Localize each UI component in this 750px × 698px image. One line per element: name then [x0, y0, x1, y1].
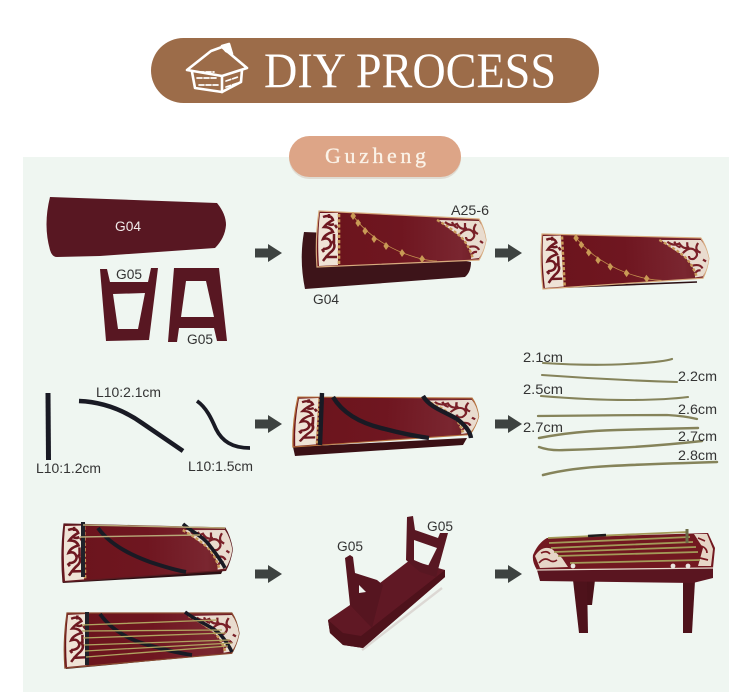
part: strings with lengths: 2.8cm [678, 448, 717, 463]
step: A25-6 board over G04: A25-6 [451, 203, 489, 218]
step: finished guzheng [533, 529, 715, 633]
part: bridge L10 1.5cm: L10:1.5cm [188, 459, 253, 474]
part: G05 leg left: G05 [116, 267, 142, 282]
part: bridge L10 2.1cm: L10:2.1cm [96, 385, 161, 400]
part: G05 leg right: G05 [187, 332, 213, 347]
arrow [255, 244, 282, 262]
part: bridge L10 1.2cm [36, 393, 101, 476]
part: G05 leg left [100, 267, 158, 341]
side [537, 568, 713, 583]
part: bridge L10 1.2cm: L10:1.2cm [36, 461, 101, 476]
part: strings with lengths: 2.6cm [678, 402, 717, 417]
top [533, 533, 715, 570]
step: A25-6 board over G04 [302, 203, 489, 307]
part: strings with lengths [523, 350, 717, 475]
part: bridge L10 1.5cm [188, 401, 253, 474]
arrow [255, 565, 282, 583]
icon: log house [187, 44, 247, 92]
part: G04 base board [46, 197, 226, 257]
arrow [495, 244, 522, 262]
part: G05 leg right [168, 268, 227, 347]
base board [328, 560, 445, 648]
step: G05 legs glued to underside [328, 516, 453, 650]
legs [587, 580, 595, 605]
step: G05 legs glued to underside: G05 [427, 519, 453, 534]
part: strings with lengths: 2.2cm [678, 369, 717, 384]
subtitle pill: Guzheng [289, 136, 461, 179]
part: strings with lengths: 2.1cm [523, 350, 563, 365]
subtitle pill: Guzheng: Guzheng [325, 143, 426, 168]
panel: guzheng steps [23, 157, 729, 692]
part: strings with lengths: 2.7cm [678, 429, 717, 444]
step: A25-6 board over G04: G04 [313, 292, 339, 307]
part: bridge L10 2.1cm [79, 385, 183, 451]
arrow [255, 415, 282, 433]
part: G04 base board: G04 [115, 219, 141, 234]
step: board with first strings [61, 519, 233, 583]
title: DIY process banner [151, 38, 599, 103]
back leg [406, 516, 448, 577]
title text: DIY PROCESS [264, 42, 556, 98]
part: strings with lengths: 2.5cm [523, 382, 563, 397]
step: assembled top board [539, 230, 710, 289]
front leg [345, 555, 383, 628]
arrow [495, 415, 522, 433]
part: strings with lengths: 2.7cm [523, 420, 563, 435]
step: board with all strings [64, 605, 239, 669]
arrow [495, 565, 522, 583]
step: G05 legs glued to underside: G05 [337, 539, 363, 554]
step: board with bridges [292, 391, 480, 456]
